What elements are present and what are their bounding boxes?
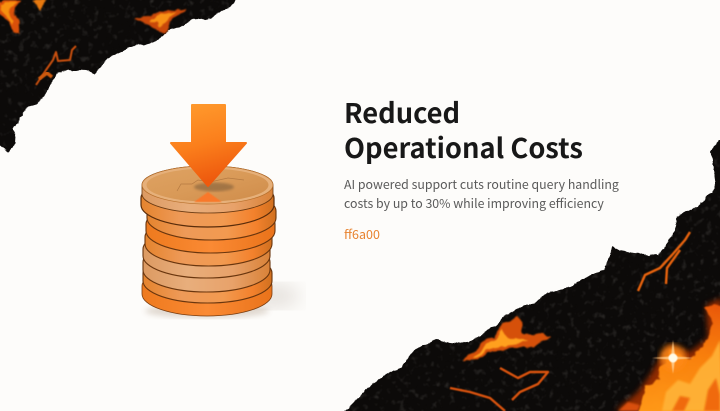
colour code label: ff6a00 — [344, 224, 380, 243]
title: Reduced — [344, 91, 460, 131]
description text: costs by up to 30% while improving efficiency — [344, 194, 604, 212]
lava glow: top left corner — [0, 0, 47, 34]
icon: coin stack with down arrow — [141, 105, 300, 318]
panel: lava rock top left — [0, 0, 237, 151]
arrow — [171, 105, 246, 186]
lava flow: centre — [463, 316, 550, 360]
top coin rim — [142, 166, 273, 213]
coin top face — [142, 166, 273, 204]
lava glow: upper edge — [135, 6, 186, 33]
arrow shadow on coin — [194, 182, 234, 192]
lava crack: lower — [450, 368, 548, 411]
lava crack — [36, 46, 76, 85]
panel: lava rock bottom right — [345, 140, 720, 411]
coins — [141, 166, 276, 316]
arrow reflection — [194, 192, 222, 202]
lava crack: upper right — [638, 232, 690, 291]
coin shadow — [244, 284, 300, 308]
description text: AI powered support cuts routine query handling — [344, 175, 619, 193]
spark — [652, 340, 694, 374]
description text — [344, 175, 619, 212]
title: Operational Costs — [344, 126, 583, 166]
lava flames: bottom right — [615, 298, 720, 411]
title — [344, 91, 583, 166]
